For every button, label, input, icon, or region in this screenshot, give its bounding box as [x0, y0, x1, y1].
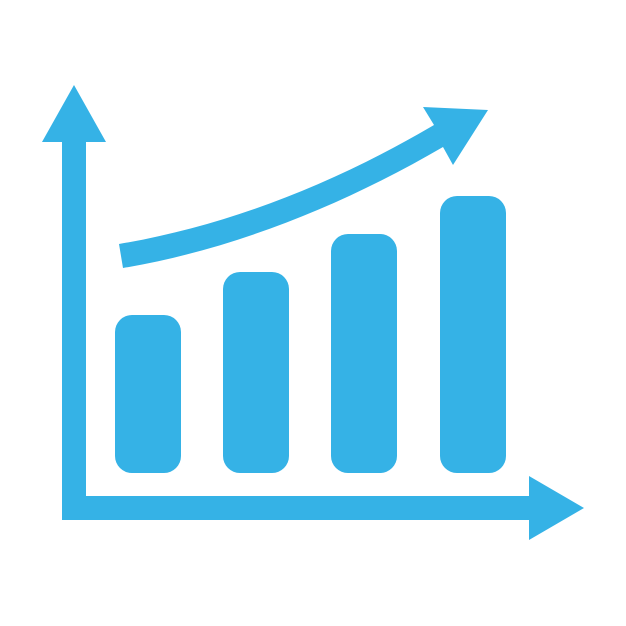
vertical axis arrow	[42, 85, 106, 496]
horizontal axis arrow	[62, 476, 584, 540]
trend arrow	[119, 107, 488, 268]
axes with arrowheads	[42, 85, 584, 540]
bar 1	[115, 315, 181, 473]
bar 4	[440, 196, 506, 473]
bar 2	[223, 272, 289, 473]
bar 3	[331, 234, 397, 473]
bars	[115, 196, 506, 473]
